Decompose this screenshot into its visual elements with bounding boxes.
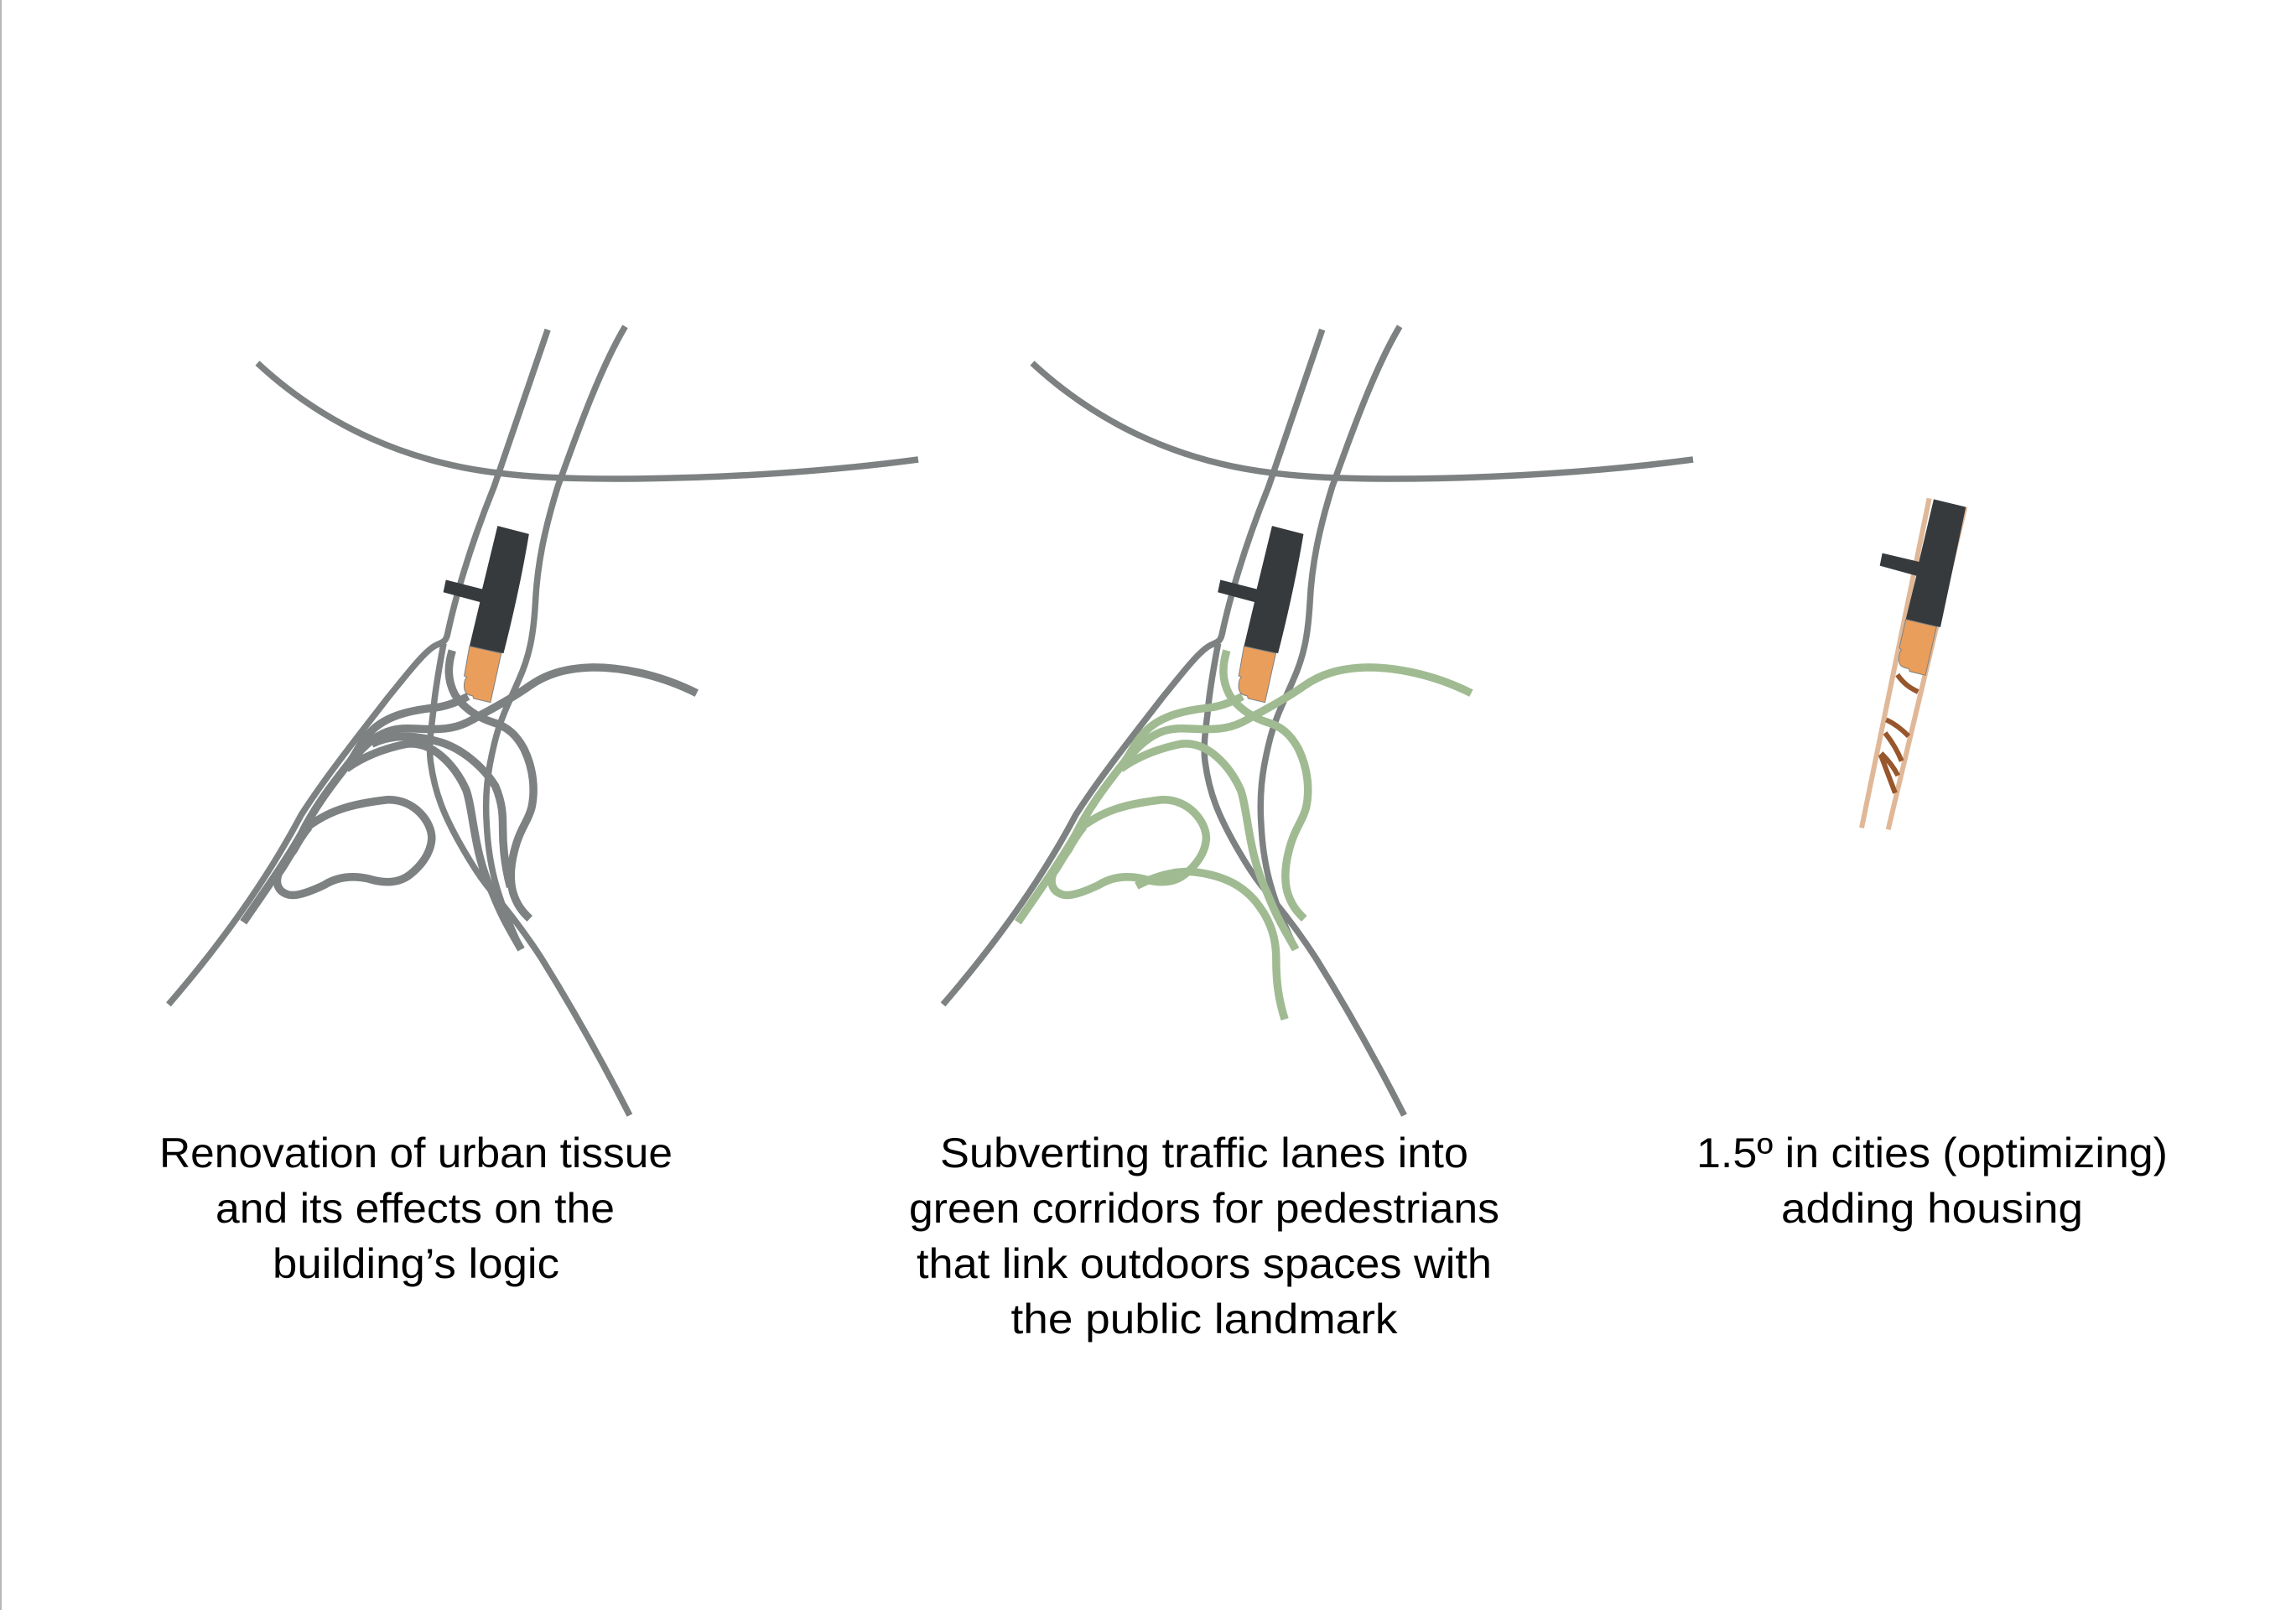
caption: renovation of urban tissue: building’s logic: [273, 1240, 559, 1287]
caption: renovation of urban tissue: [159, 1130, 673, 1287]
brown housing strokes: [1881, 675, 1918, 793]
building: [1880, 499, 1966, 675]
caption: subverting traffic lanes: the public landmark: [1011, 1296, 1399, 1343]
caption: 1.5 degrees in cities: [1696, 1130, 2168, 1232]
panel: adding housing: [1862, 498, 1966, 829]
building: [444, 526, 529, 703]
cross road: [1032, 363, 1693, 479]
caption: subverting traffic lanes: green corridors for pedestrians: [909, 1185, 1499, 1232]
cross road: [257, 363, 918, 479]
road network and traffic lanes: [169, 326, 697, 1115]
panel: renovation of urban tissue: [169, 326, 918, 1115]
caption: subverting traffic lanes: Subverting traffic lanes into: [940, 1130, 1468, 1176]
building: [1218, 526, 1303, 703]
tan rails: [1862, 498, 1965, 829]
roads and green corridors: [943, 326, 1471, 1115]
caption: 1.5 degrees in cities: adding housing: [1781, 1185, 2083, 1232]
caption: 1.5 degrees in cities: 1.5º in cities (optimizing): [1696, 1130, 2168, 1176]
caption: subverting traffic lanes: [909, 1130, 1499, 1343]
panel: green corridors: [943, 326, 1693, 1115]
caption: renovation of urban tissue: Renovation of urban tissue: [159, 1130, 673, 1176]
caption: renovation of urban tissue: and its effects on the: [216, 1185, 615, 1232]
caption: subverting traffic lanes: that link outdoors spaces with: [917, 1240, 1492, 1287]
